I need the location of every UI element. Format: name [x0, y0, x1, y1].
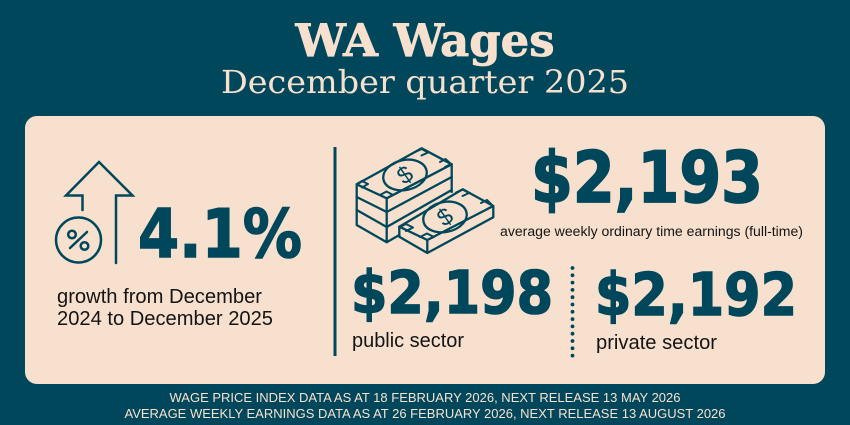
stat: average weekly earnings: $2,193	[531, 137, 763, 219]
text: public sector label: public sector	[352, 330, 464, 352]
text: growth description: 2024 to December 2025	[57, 308, 273, 330]
text: private sector label: private sector	[596, 332, 717, 354]
stat: private sector: $2,192	[595, 260, 797, 329]
subtitle: December quarter 2025	[221, 63, 629, 101]
divider: vertical	[334, 147, 336, 356]
icon: dollar signs on banknotes: $	[432, 203, 459, 232]
footer notes	[124, 390, 726, 421]
stat: public sector: $2,198	[351, 258, 553, 327]
text: growth description: growth from December	[57, 286, 262, 308]
icon: upward arrow with percent	[56, 162, 132, 263]
icon: stacks of banknotes	[357, 148, 493, 253]
stat: wage growth: 4.1%	[138, 195, 302, 273]
footer notes: AVERAGE WEEKLY EARNINGS DATA AS AT 26 FEBRUARY 2026, NEXT RELEASE 13 AUGUST 2026	[124, 406, 726, 421]
icon: dollar signs on banknotes	[392, 161, 459, 232]
title: WA Wages	[295, 14, 554, 67]
divider: dotted	[571, 268, 574, 356]
icon: dollar signs on banknotes: $	[392, 161, 419, 190]
text: average weekly label: average weekly ordinary time earnings (full-time)	[500, 224, 803, 239]
footer notes: WAGE PRICE INDEX DATA AS AT 18 FEBRUARY 2026, NEXT RELEASE 13 MAY 2026	[170, 390, 680, 405]
text: growth description	[57, 286, 273, 330]
panel: main card	[25, 116, 825, 384]
